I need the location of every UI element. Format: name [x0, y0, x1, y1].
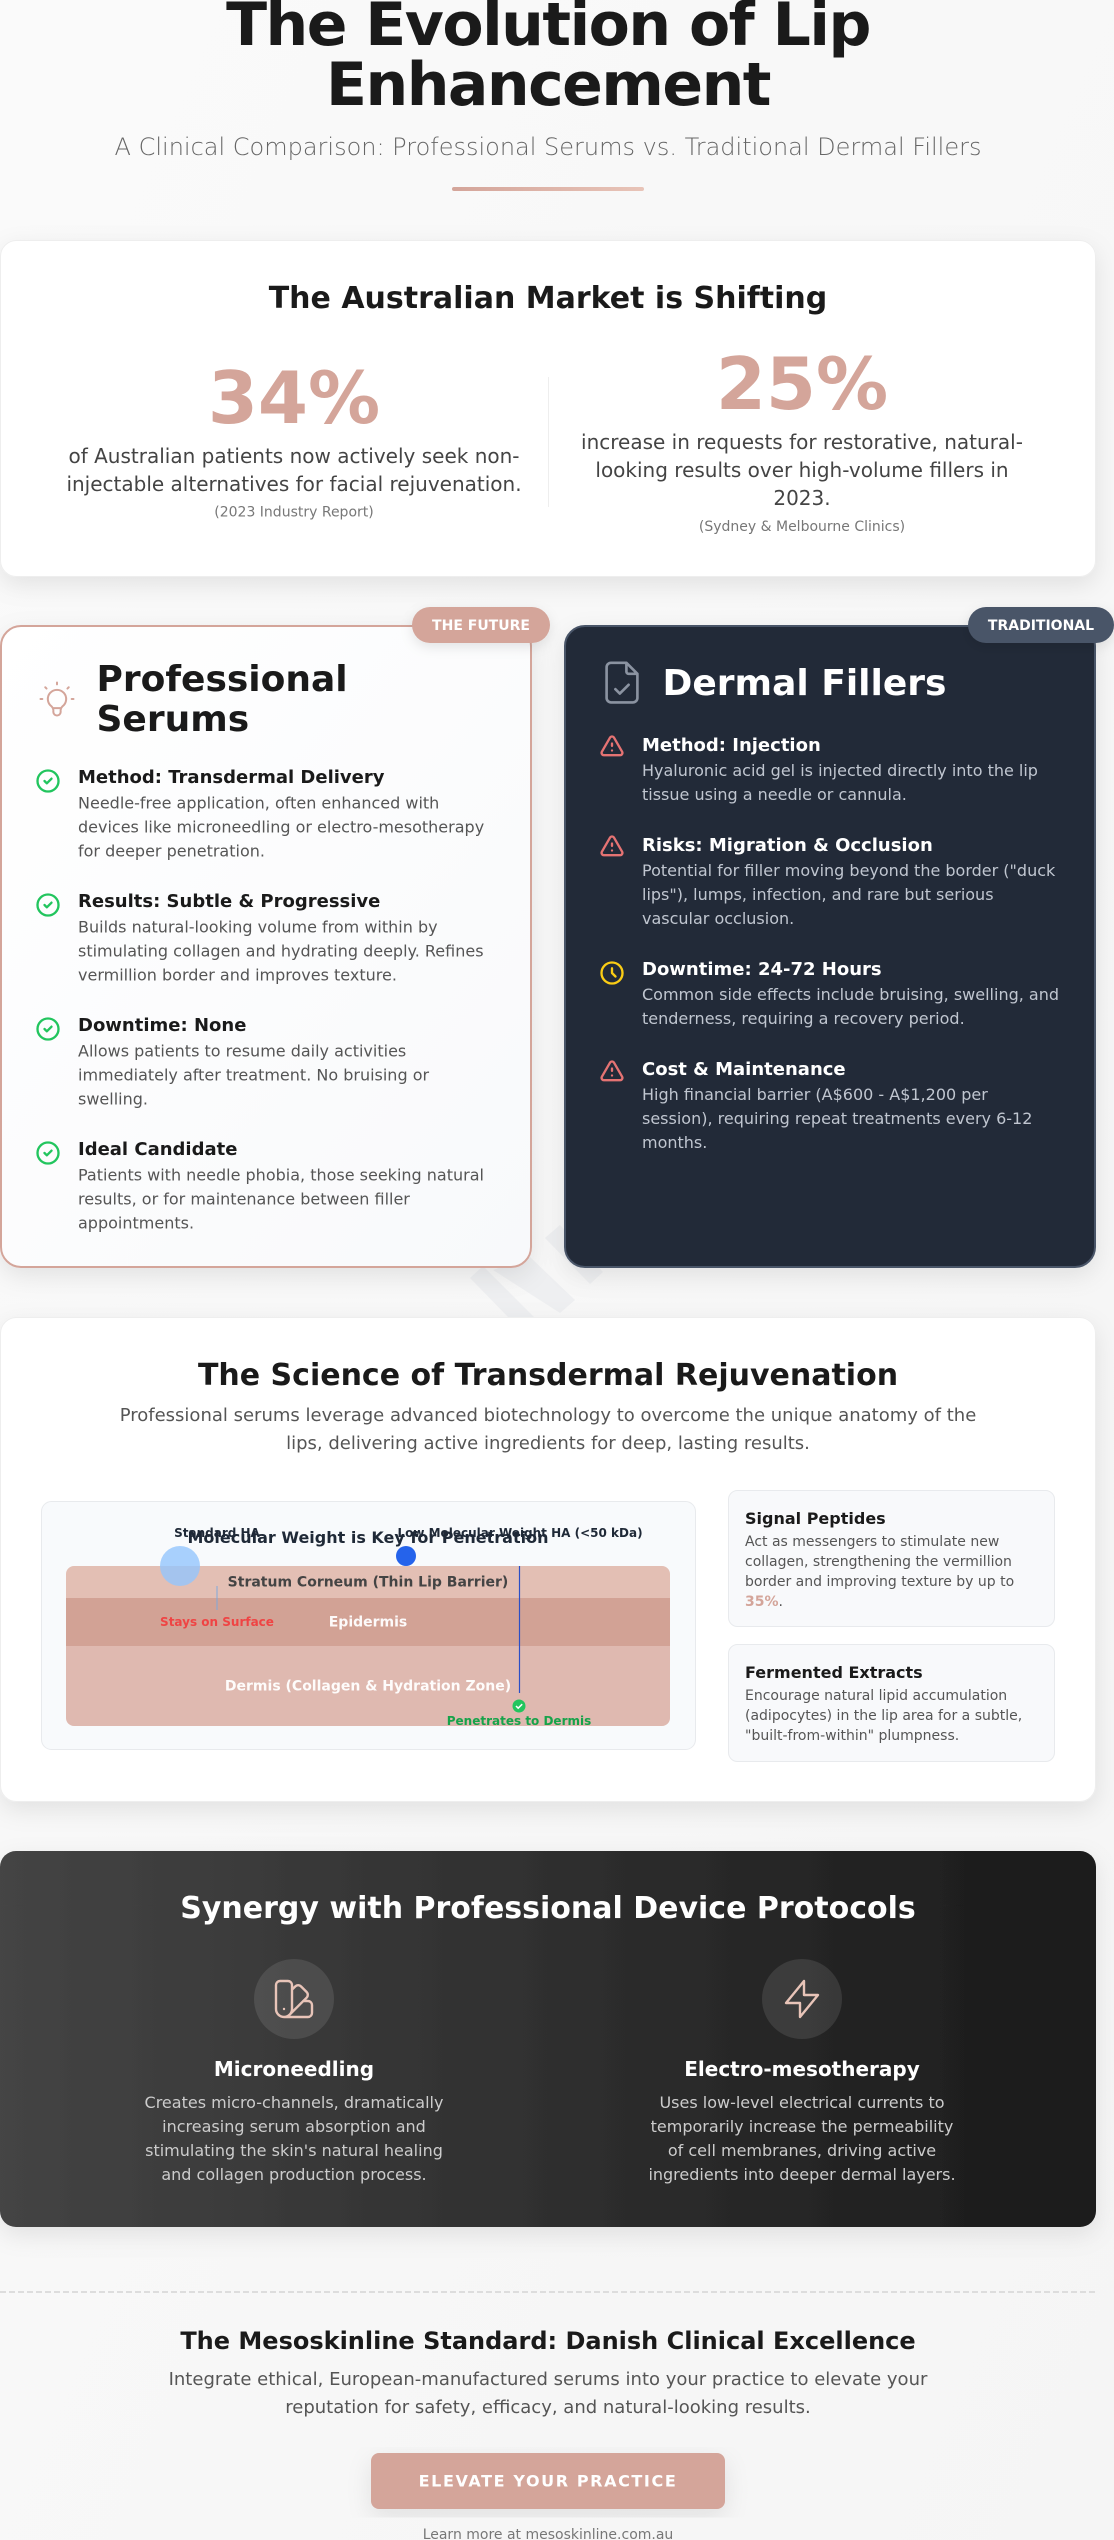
low molecular weight HA molecule [396, 1526, 643, 1728]
diagram heading: Molecular Weight is Key for Penetration [188, 1528, 548, 1547]
filler item: cost: session), requiring repeat treatments every 6-12 [642, 1109, 1032, 1128]
serum item: results: Results: Subtle & Progressive [78, 891, 380, 912]
skin layers [66, 1566, 670, 1726]
device: electro-mesotherapy: Uses low-level electrical currents to [659, 2093, 945, 2112]
filler item: risks: Risks: Migration & Occlusion [642, 835, 933, 856]
serum item: results: vermillion border and improves texture. [78, 966, 397, 984]
serums heading: Professional [96, 659, 348, 700]
serum item: ideal candidate [38, 1139, 484, 1232]
standard HA molecule: Standard HA [174, 1526, 261, 1540]
diagram: molecular weight penetration: Stratum Corneum (Thin Lip Barrier) [228, 1574, 508, 1590]
filler item: method: Hyaluronic acid gel is injected directly into the lip [642, 761, 1038, 780]
low molecular weight HA molecule: Penetrates to Dermis [447, 1714, 591, 1728]
icon: document check [607, 663, 637, 702]
button: ELEVATE YOUR PRACTICE [419, 2472, 677, 2490]
card: fermented extracts: Fermented Extracts [745, 1663, 923, 1682]
stat: 34%: of Australian patients now actively seek non- [68, 444, 520, 468]
panel: market stats [0, 240, 1096, 576]
serum item: method: Method: Transdermal Delivery [78, 767, 385, 788]
diagram: molecular weight penetration: Epidermis [329, 1614, 407, 1630]
footer text: reputation for safety, efficacy, and natural-looking results. [285, 2397, 811, 2418]
stat: 34% [66, 356, 522, 520]
filler item: method [602, 735, 1038, 804]
serum item: downtime: Downtime: None [78, 1015, 246, 1036]
badge: the future: THE FUTURE [432, 618, 530, 634]
serum item: downtime: immediately after treatment. No bruising or [78, 1066, 429, 1084]
science intro [120, 1405, 976, 1454]
device: microneedling: increasing serum absorption and [162, 2117, 426, 2136]
header [115, 0, 981, 191]
stat: 25%: 25% [716, 342, 888, 426]
serum item: results: stimulating collagen and hydrating deeply. Refines [78, 942, 484, 960]
filler item: cost: months. [642, 1133, 707, 1152]
stat: 34%: 34% [208, 356, 380, 440]
card: fermented extracts: (adipocytes) in the lip area for a subtle, [745, 1708, 1022, 1724]
market heading: The Australian Market is Shifting [269, 281, 827, 316]
serum item: downtime [38, 1015, 429, 1108]
filler item: method: tissue using a needle or cannula. [642, 785, 907, 804]
device: electro-mesotherapy: ingredients into deeper dermal layers. [648, 2165, 956, 2184]
footer text: Integrate ethical, European-manufactured serums into your practice to elevate your [169, 2369, 928, 2390]
badge: traditional: TRADITIONAL [988, 618, 1094, 634]
serum item: method: for deeper penetration. [78, 842, 265, 860]
serum item: method: Needle-free application, often enhanced with [78, 794, 439, 812]
device: microneedling: Creates micro-channels, dramatically [145, 2093, 443, 2112]
footer heading: The Mesoskinline Standard: Danish Clinical Excellence [180, 2327, 916, 2355]
serum item: downtime: Allows patients to resume daily activities [78, 1042, 406, 1060]
synergy heading: Synergy with Professional Device Protocols [180, 1891, 916, 1926]
card: fermented extracts [728, 1644, 1054, 1762]
serum item: downtime: swelling. [78, 1090, 148, 1108]
serum item: method [38, 767, 484, 860]
filler item: downtime: Common side effects include bruising, swelling, and [642, 985, 1059, 1004]
card: signal peptides: collagen, strengthening the vermillion [745, 1554, 1012, 1570]
fillers heading: Dermal Fillers [662, 663, 946, 704]
button [371, 2453, 725, 2509]
device: microneedling: and collagen production process. [161, 2165, 427, 2184]
serums heading [96, 659, 348, 740]
panel: professional serums [1, 607, 550, 1267]
filler item: method: Method: Injection [642, 735, 821, 756]
serum item: ideal candidate: appointments. [78, 1214, 194, 1232]
card: signal peptides: border and improving texture by up to [745, 1574, 1014, 1590]
card: signal peptides: Act as messengers to stimulate new [745, 1534, 999, 1550]
card: fermented extracts: "built-from-within" plumpness. [745, 1728, 959, 1744]
panel: device synergy [0, 1851, 1096, 2227]
stat: 25%: (Sydney & Melbourne Clinics) [699, 519, 905, 535]
science intro: Professional serums leverage advanced biotechnology to overcome the unique anatomy of the [120, 1405, 976, 1426]
title: Enhancement [326, 50, 771, 120]
filler item: cost: High financial barrier (A$600 - A$1,200 per [642, 1085, 988, 1104]
stat: 25%: 2023. [773, 486, 831, 510]
card: fermented extracts: Encourage natural lipid accumulation [745, 1688, 1007, 1704]
filler item: cost: Cost & Maintenance [642, 1059, 846, 1080]
serum item: ideal candidate: Ideal Candidate [78, 1139, 237, 1160]
panel: dermal fillers [565, 607, 1114, 1267]
serum item: results: Builds natural-looking volume from within by [78, 918, 438, 936]
background watermark [470, 1225, 603, 1317]
filler item: downtime: tenderness, requiring a recovery period. [642, 1009, 965, 1028]
filler item: risks [602, 835, 1056, 928]
standard HA molecule [160, 1526, 274, 1629]
device: microneedling: stimulating the skin's natural healing [145, 2141, 443, 2160]
science heading: The Science of Transdermal Rejuvenation [198, 1358, 898, 1393]
low molecular weight HA molecule: Low Molecular Weight HA (<50 kDa) [397, 1526, 643, 1540]
card: signal peptides [728, 1490, 1054, 1626]
badge: traditional [968, 607, 1114, 643]
filler item: downtime [602, 959, 1059, 1028]
device: electro-mesotherapy: of cell membranes, driving active [668, 2141, 936, 2160]
device: electro-mesotherapy: Electro-mesotherapy [684, 2057, 920, 2081]
footer text [169, 2369, 928, 2418]
title [226, 0, 870, 120]
card: signal peptides: Signal Peptides [745, 1509, 886, 1528]
serum item: results [38, 891, 484, 984]
stat: 25%: looking results over high-volume fillers in [595, 458, 1009, 482]
serum item: method: devices like microneedling or electro-mesotherapy [78, 818, 484, 836]
device: microneedling [145, 1959, 443, 2184]
footer call to action [169, 2327, 928, 2540]
panel: science [0, 1318, 1096, 1802]
science intro: lips, delivering active ingredients for deep, lasting results. [286, 1433, 810, 1454]
stat: 25%: increase in requests for restorative, natural- [581, 430, 1023, 454]
header accent bar [452, 187, 644, 191]
stat: 34%: (2023 Industry Report) [214, 504, 374, 520]
filler item: cost [602, 1059, 1032, 1152]
filler item: risks: lips"), lumps, infection, and rare but serious [642, 885, 994, 904]
device: microneedling: Microneedling [214, 2057, 374, 2081]
filler item: downtime: Downtime: 24-72 Hours [642, 959, 882, 980]
filler item: risks: Potential for filler moving beyond the border ("duck [642, 861, 1056, 880]
badge: the future [412, 607, 550, 643]
stat: 25% [581, 342, 1023, 535]
diagram: molecular weight penetration: Dermis (Collagen & Hydration Zone) [225, 1678, 511, 1694]
stat: 34%: injectable alternatives for facial rejuvenation. [66, 472, 522, 496]
serum item: ideal candidate: Patients with needle phobia, those seeking natural [78, 1166, 484, 1184]
subtitle: A Clinical Comparison: Professional Serums vs. Traditional Dermal Fillers [115, 133, 981, 161]
standard HA molecule: Stays on Surface [160, 1615, 274, 1629]
card: signal peptides: 35%. [745, 1594, 783, 1610]
device: electro-mesotherapy: temporarily increase the permeability [651, 2117, 953, 2136]
icon: light bulb [40, 682, 73, 715]
diagram: molecular weight penetration [42, 1502, 696, 1750]
device: electro-mesotherapy [648, 1959, 956, 2184]
serum item: ideal candidate: results, or for maintenance between filler [78, 1190, 410, 1208]
serums heading: Serums [96, 699, 249, 740]
filler item: risks: vascular occlusion. [642, 909, 794, 928]
